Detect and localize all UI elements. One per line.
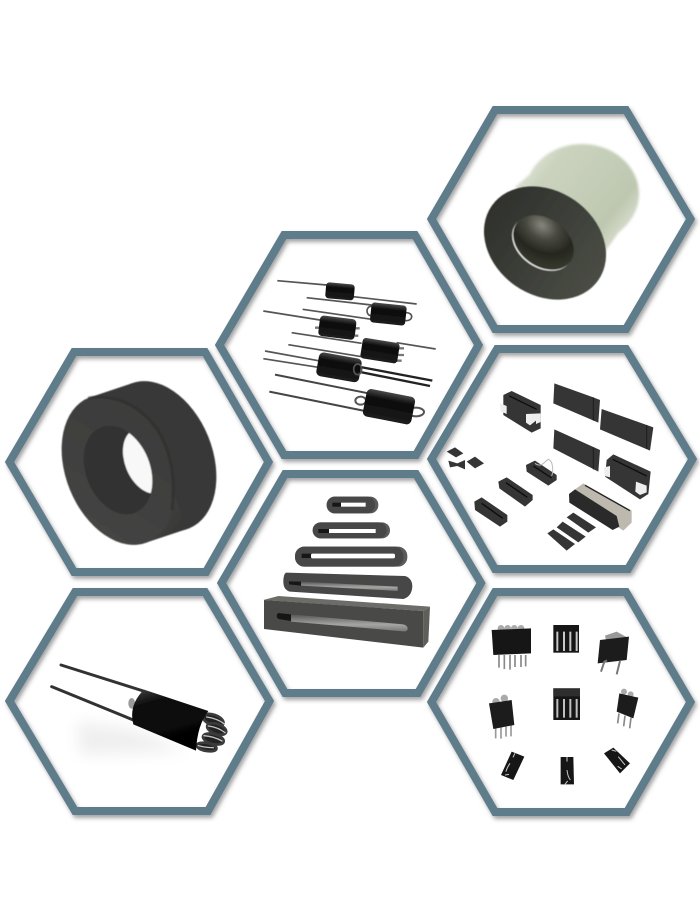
product: assorted surface mount beads [447,383,653,551]
hexagon frame: middle left [10,352,268,572]
inner coil glint [128,698,135,709]
leads [52,665,143,720]
hexagon frame: top right [432,110,690,329]
hexagon frame: bottom left [10,592,270,811]
hexagon frame: middle right [432,349,692,569]
pin block middle left [489,695,514,739]
long block core [263,596,430,611]
barred chip top centre [553,625,579,653]
pin block middle right [617,689,638,728]
bead bodies [316,282,416,425]
square edged core [283,573,412,599]
wired chip lower left [501,752,524,780]
leads [263,281,436,416]
tube body [132,690,208,751]
wired chip lower centre [561,757,574,784]
infographic canvas [4,106,700,822]
product: slotted multi-aperture cores [263,497,430,648]
angled chip top right [598,632,629,674]
product: multi-turn chip beads [489,625,638,784]
slotted blocks [526,461,557,486]
clip bead upper [503,391,541,433]
product: wound bead with two leads [52,665,228,755]
wired chip lower right [604,748,630,773]
hexagon frame: bottom right [432,592,690,812]
small loop [327,497,378,513]
small chips [447,447,463,457]
assembled core [575,483,632,531]
coil turns [196,711,228,753]
soft floor shadow [77,722,187,755]
large loop [295,547,407,567]
large strips [553,383,600,423]
hexagon frame: upper centre [220,235,478,455]
clip bead lower [605,454,651,499]
product: pale green cylinder core [462,144,639,323]
hexagon frame: lower centre [222,474,481,693]
product: axial wire beads [263,281,436,425]
pin block top left [492,625,531,670]
barred chip centre [553,688,580,720]
flat plates [567,513,596,533]
product: black ring core [60,380,218,546]
medium loop [313,522,390,538]
